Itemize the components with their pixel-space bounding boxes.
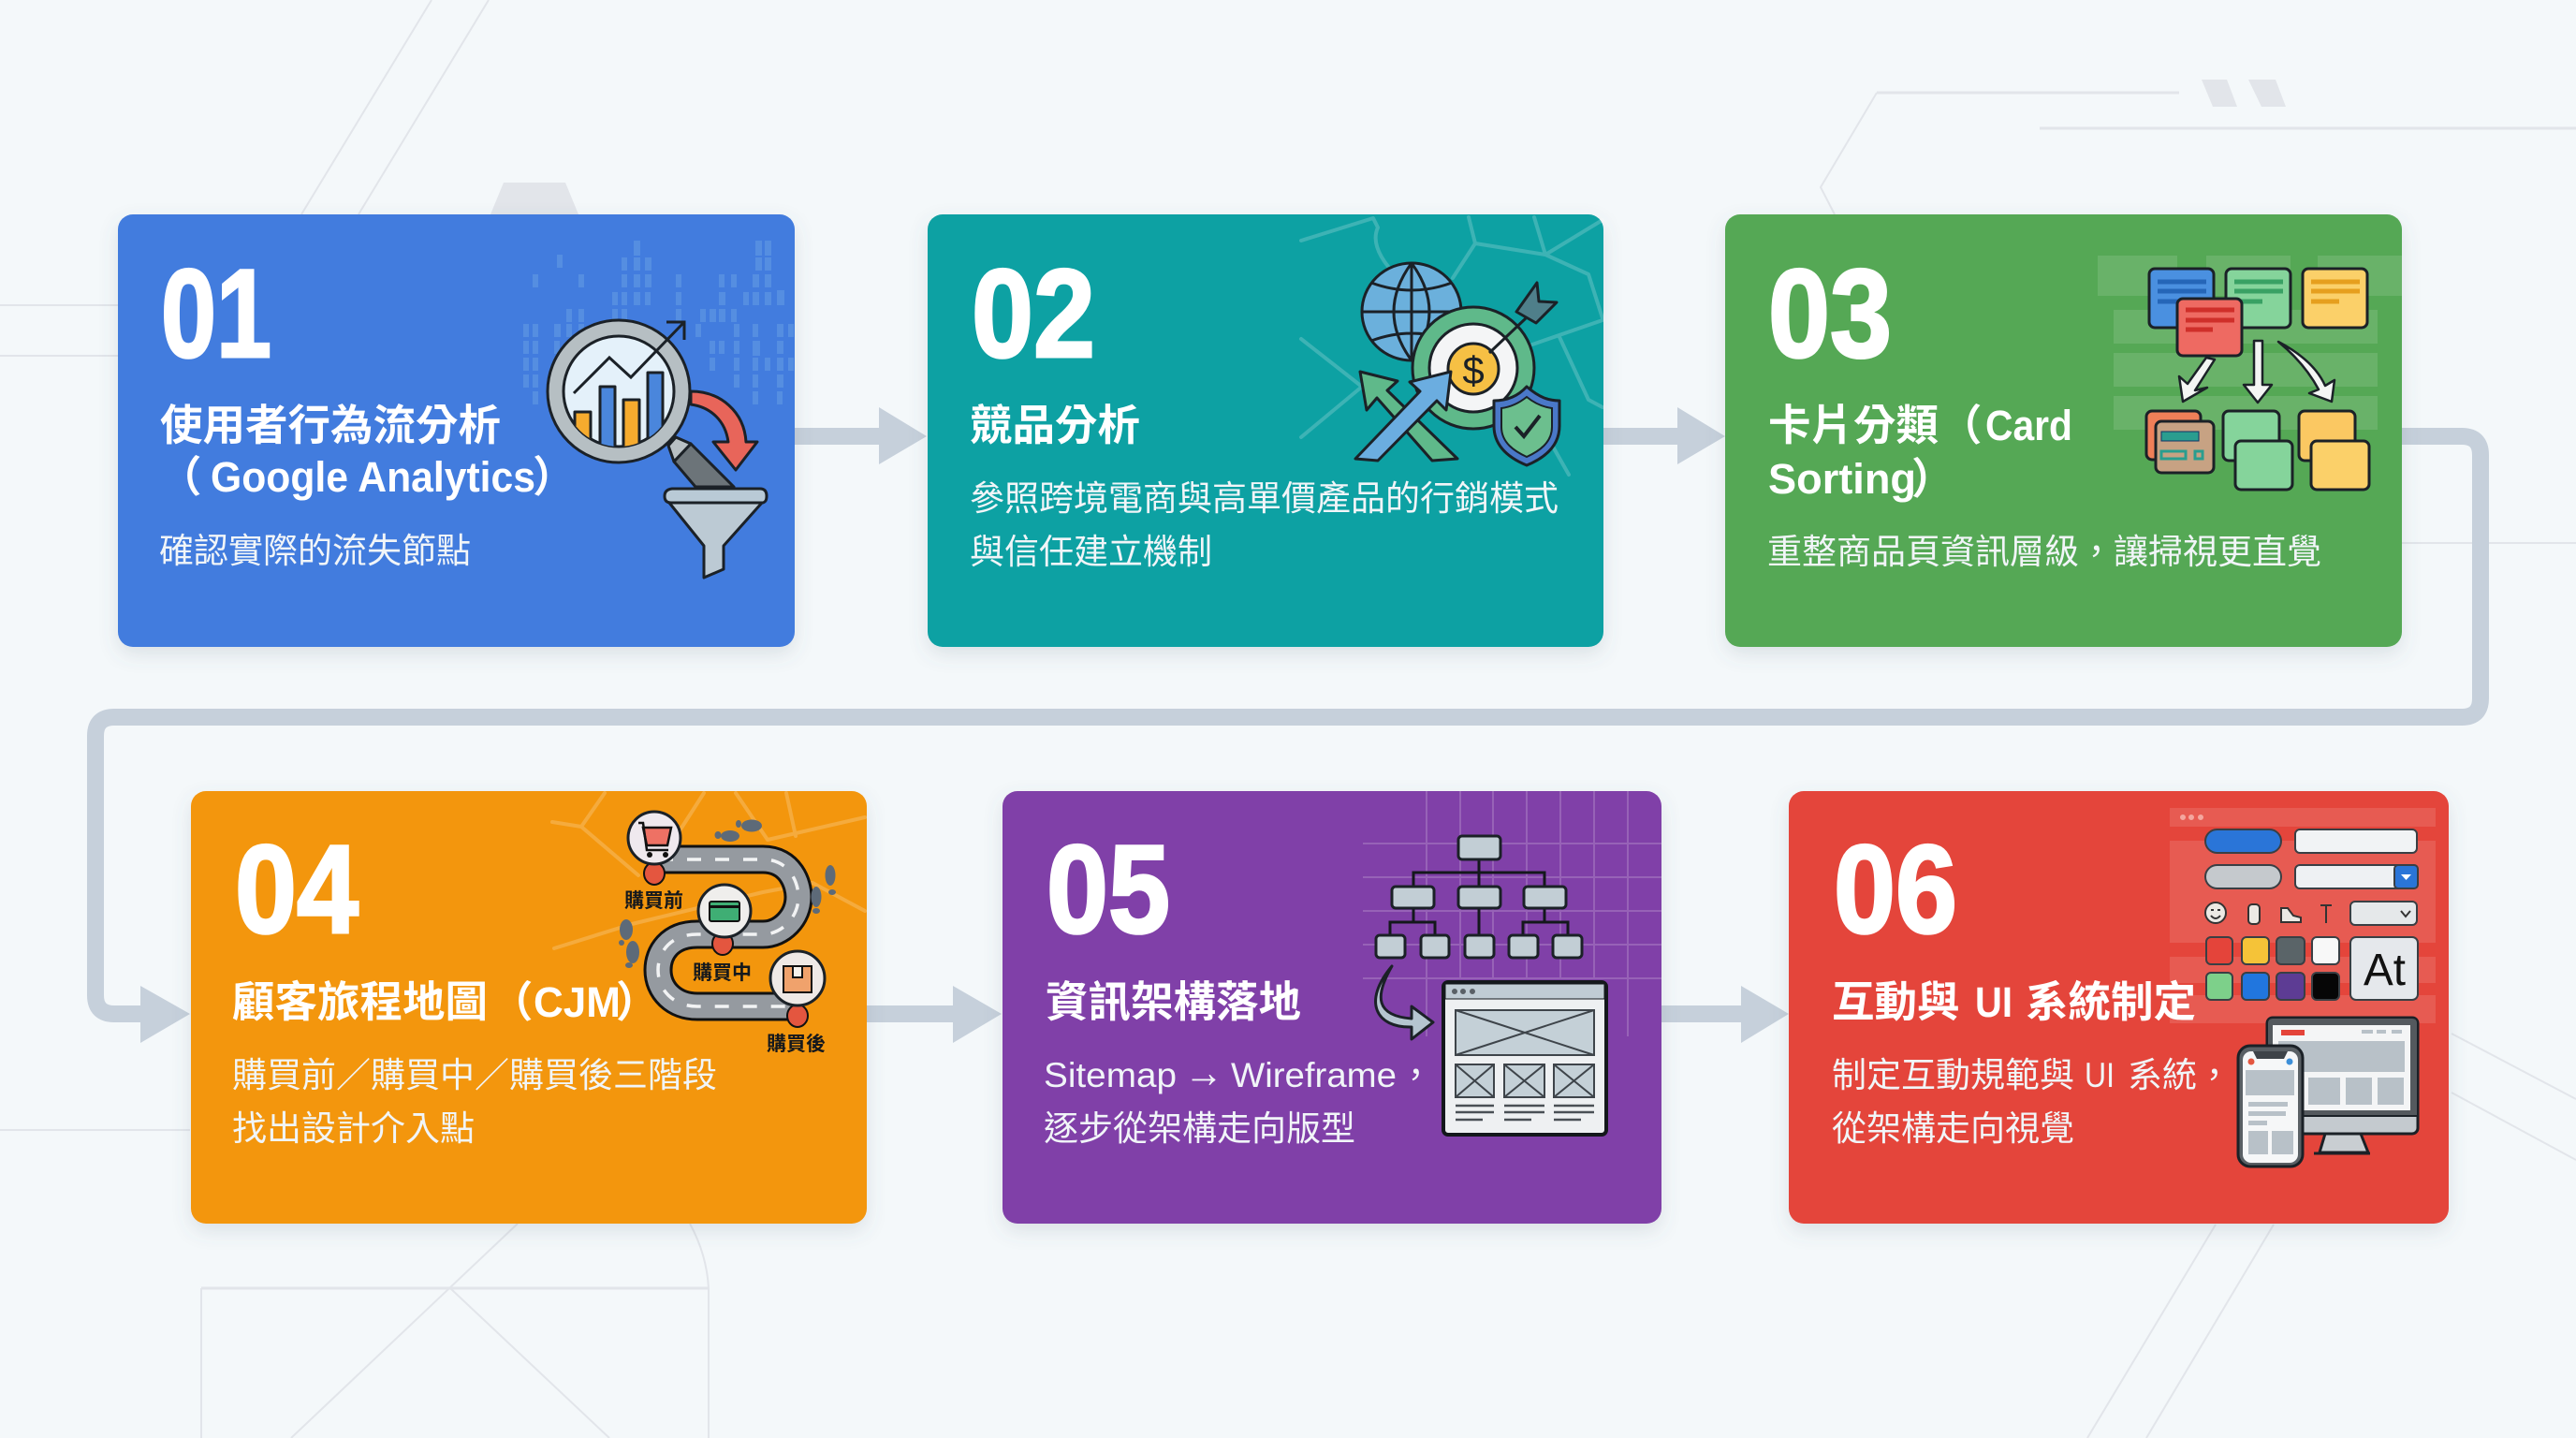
panel: 06 interaction and UI system (1789, 791, 2449, 1224)
heading line 2: ） (1911, 455, 1954, 503)
number: 01 (161, 244, 271, 384)
heading: 使用者行為流分析 (160, 402, 501, 449)
connector arrows (95, 407, 2481, 1043)
description: ， (1398, 1056, 1433, 1094)
heading: 卡片分類 (1768, 402, 1939, 449)
heading: 互動與 (1832, 978, 1960, 1026)
number: 02 (972, 244, 1095, 384)
stage labels: 購買後 (767, 1034, 826, 1055)
icon: journey road with stops (619, 812, 836, 1055)
description: 找出設計介入點 (232, 1109, 475, 1148)
description: UI (2085, 1056, 2115, 1094)
dollar sign: $ (1462, 348, 1485, 392)
heading: ） (616, 978, 659, 1026)
description: 從架構走向視覺 (1832, 1109, 2074, 1148)
stage labels: 購買中 (693, 962, 752, 984)
description: → (1184, 1048, 1223, 1096)
heading: 顧客旅程地圖 (232, 978, 488, 1026)
description: 與信任建立機制 (970, 533, 1212, 571)
heading: 資訊架構落地 (1046, 978, 1301, 1026)
description: 確認實際的流失節點 (159, 532, 471, 570)
description: ， (2197, 1056, 2232, 1094)
panel: 04 customer journey map (191, 791, 867, 1224)
icon: magnifier over funnel (548, 320, 767, 578)
description: 購買前／購買中／購買後三階段 (232, 1056, 717, 1094)
card background (1789, 791, 2449, 1224)
description: 制定互動規範與 (1832, 1056, 2074, 1094)
stage labels: 購買前 (624, 890, 683, 912)
grid texture (1363, 791, 1661, 1036)
description: Sitemap (1044, 1056, 1177, 1094)
description: 重整商品頁資訊層級，讓掃視更直覺 (1767, 533, 2321, 571)
heading line 2: Google Analytics (211, 453, 535, 501)
number: 05 (1046, 820, 1170, 960)
icon: card sorting (2146, 269, 2369, 490)
heading: 系統制定 (2026, 978, 2196, 1026)
description: Wireframe (1231, 1056, 1397, 1094)
heading: 競品分析 (970, 402, 1140, 449)
card background (928, 214, 1603, 647)
card background (1725, 214, 2402, 647)
panel: 03 card sorting (1725, 214, 2402, 647)
translucent panels (2170, 808, 2436, 1023)
number: 06 (1834, 820, 1957, 960)
network texture (1301, 217, 1603, 475)
number: 04 (235, 820, 359, 960)
card background (1003, 791, 1661, 1224)
description: 逐步從架構走向版型 (1044, 1109, 1355, 1148)
heading: （ (1939, 402, 1983, 449)
icon: globe, target and shield (1355, 263, 1559, 465)
number: 03 (1768, 244, 1892, 384)
heading: Card (1985, 402, 2072, 449)
data stream texture (523, 241, 794, 404)
heading line 2: （ (159, 453, 202, 501)
card background (191, 791, 867, 1224)
icon: sitemap to wireframe (1376, 836, 1606, 1135)
heading: （ (490, 978, 534, 1026)
panel: 02 competitor analysis (928, 214, 1603, 647)
icon: desktop and phone (2238, 1018, 2418, 1167)
heading line 2: Sorting (1768, 455, 1916, 503)
panel: 01 user behaviour analysis (118, 214, 795, 647)
type specimen: At (2364, 946, 2406, 995)
panel: 05 information architecture (1003, 791, 1661, 1224)
card background (118, 214, 795, 647)
network texture (552, 793, 865, 948)
translucent rows (2098, 256, 2402, 430)
description: 系統 (2128, 1056, 2197, 1094)
heading line 2: ） (533, 453, 576, 501)
description: 參照跨境電商與高單價產品的行銷模式 (970, 479, 1559, 518)
icon: UI kit components (2180, 814, 2418, 1000)
heading: CJM (534, 978, 621, 1026)
heading: UI (1975, 978, 2012, 1026)
